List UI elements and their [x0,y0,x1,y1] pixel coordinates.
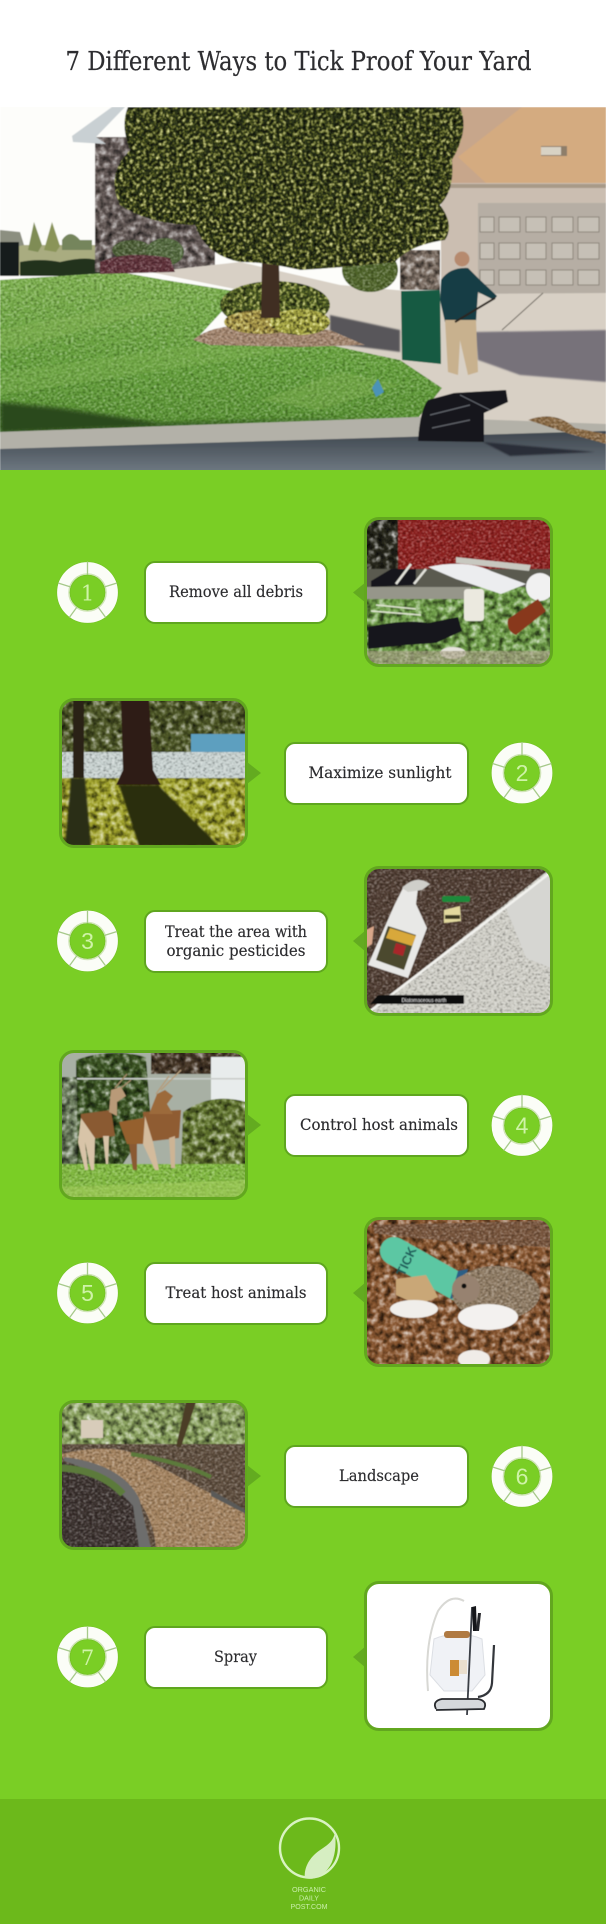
photo: pesticide bottle and diatomaceous earth [366,868,552,1014]
hero photo: man raking debris in front yard [0,100,606,475]
title: 7 Different Ways to Tick Proof Your Yard [66,47,532,77]
lawn stripes and shadow [0,300,410,433]
photo: pesticide bottle and diatomaceous earth: Diatomaceous earth [402,998,447,1004]
green trash bin [401,290,441,364]
sidewalk curb [0,417,606,450]
label box 3 [145,911,327,972]
number ring 4 [492,1094,552,1150]
arrow 1 [353,582,366,603]
label box 2: Maximize sunlight [308,764,452,782]
icon: leaf [305,1832,336,1879]
tree trunk [261,262,280,318]
label box 3: Treat the area with [165,923,307,941]
stucco wall and garage [440,107,606,294]
foreground shrubs and red bushes [100,238,440,292]
label box 1: Remove all debris [169,583,303,601]
logo text [290,1885,328,1911]
label box 6: Landscape [339,1467,419,1485]
number ring 1: 1 [81,582,94,606]
number ring 1 [58,562,117,618]
logo text: POST.COM [290,1902,328,1911]
number ring 4: 4 [516,1112,529,1138]
number ring 5: 5 [81,1280,94,1306]
number ring 2: 2 [516,760,528,786]
photo: backpack sprayer on white [366,1583,551,1729]
step 3 [58,868,552,1014]
garage door [478,203,606,294]
label box 4: Control host animals [300,1116,458,1134]
label box 5: Treat host animals [166,1284,307,1302]
main green panel [0,470,606,1799]
label box 5 [145,1263,327,1324]
number ring 6: 6 [516,1464,528,1490]
logo circle [280,1818,339,1878]
roof gable [72,107,125,144]
logo text: DAILY [299,1894,319,1902]
arrow 2 [247,762,261,784]
logo text: ORGANIC [292,1885,327,1894]
footer band [0,1799,606,1924]
photo: mouse with tick tube [366,1218,552,1368]
number ring 2 [492,742,552,798]
number ring 3: 3 [81,928,94,954]
label box 2 [285,743,468,804]
fallen leaves [528,416,606,444]
man with rake [440,252,543,375]
step 1 [58,518,554,666]
number ring 7 [58,1626,117,1682]
label box 3: organic pesticides [166,942,306,960]
black garbage bag [418,390,595,456]
label box 1 [145,562,327,623]
arrow 4 [247,1114,261,1136]
step 4 [60,1052,552,1198]
photo: sunlit trees [60,700,246,846]
driveway and walkway [150,262,606,435]
arrow 7 [353,1646,366,1668]
three deer [78,1070,181,1170]
photo: mouse with tick tube: TICK [393,1244,420,1278]
road [0,430,606,470]
number ring 6 [492,1446,552,1502]
arrow 3 [353,930,366,952]
step 6 [60,1402,552,1548]
step 5 [58,1218,552,1368]
label box 7 [145,1627,327,1688]
photo: deer on a lawn [60,1052,246,1198]
distant field and trees [0,222,100,276]
label box 7: Spray [214,1648,257,1666]
arrow 6 [247,1465,261,1487]
number ring 5 [58,1262,117,1318]
number ring 3 [58,910,117,966]
label box 4 [285,1095,468,1156]
stone house wall [95,137,215,272]
small blue flag [372,379,384,397]
number ring 7: 7 [81,1646,94,1670]
photo: landscaped garden path [60,1402,246,1548]
step 7 [58,1582,552,1730]
photo frame 7 [366,1582,552,1730]
garden bed with rocks and flowers [193,281,365,347]
label box 6 [285,1446,468,1507]
tree foliage [114,107,464,270]
step 2 [60,700,552,846]
footer logo [280,1818,339,1911]
arrow 5 [353,1282,366,1304]
photo: yard debris [366,518,554,666]
lawn [0,272,442,432]
